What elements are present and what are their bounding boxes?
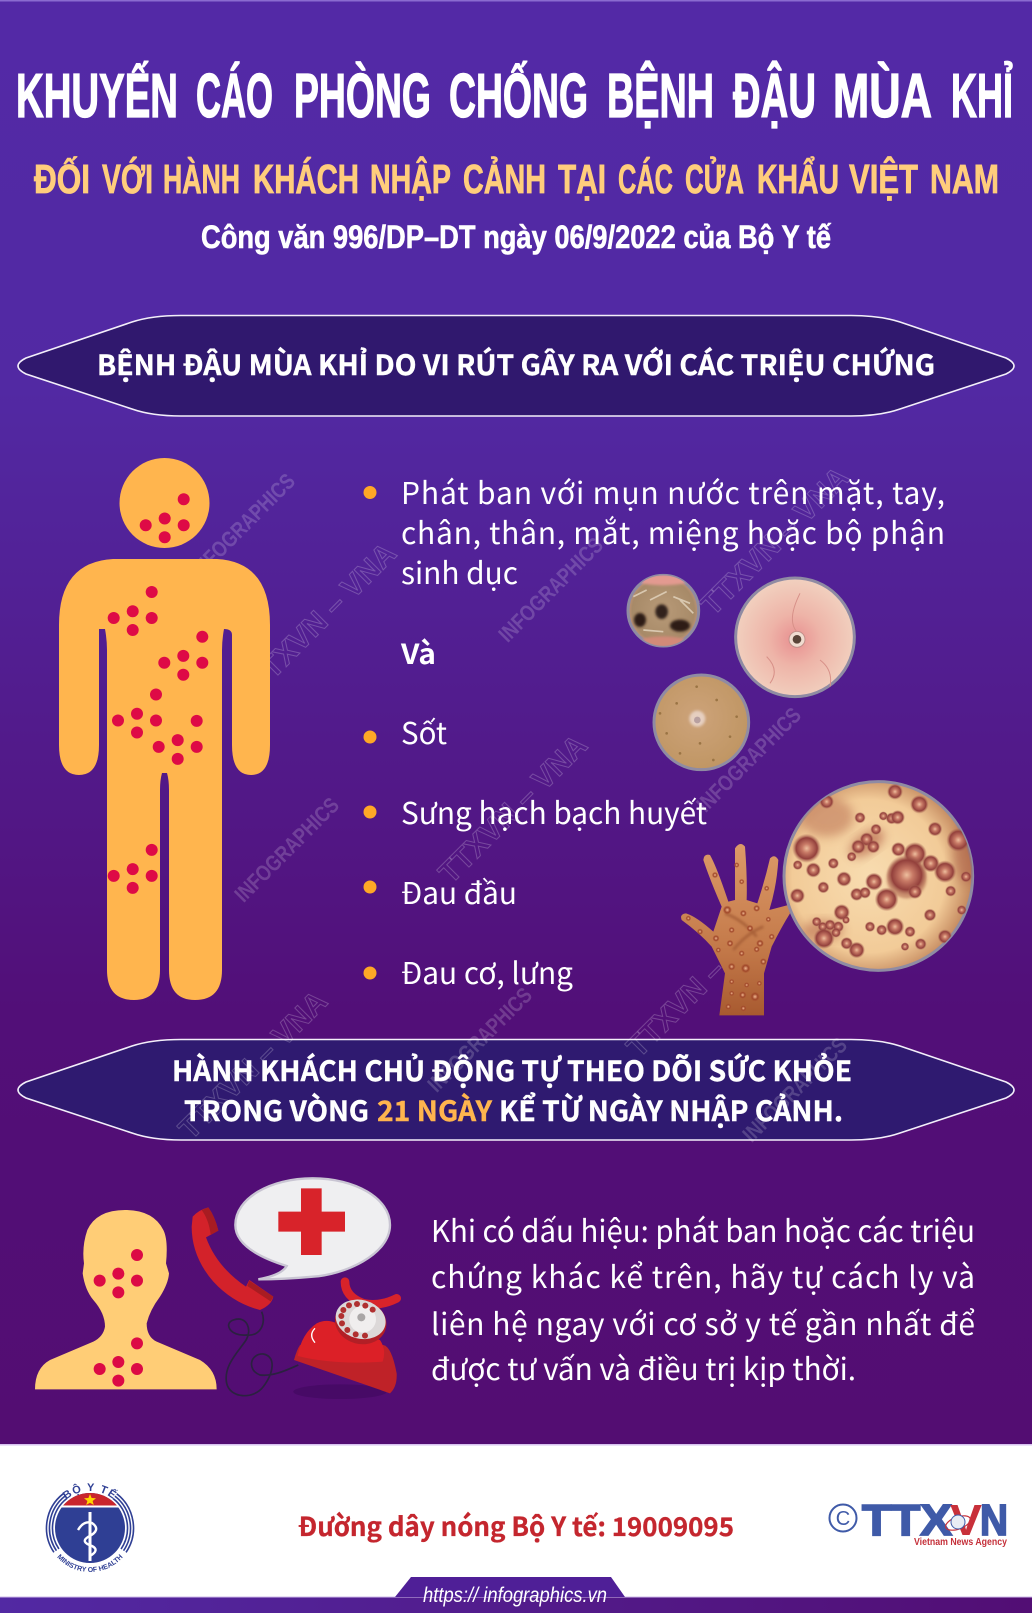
banner heading: symptoms: BỆNH ĐẬU MÙA KHỈ DO VI RÚT GÂY RA VỚI CÁC TRIỆU CHỨNG (97, 344, 935, 384)
watermarks: TTXVN – VNA (695, 461, 856, 622)
title: BỆNH (607, 62, 714, 131)
skin photos (628, 575, 980, 1015)
subtitle: VIỆT (849, 156, 918, 202)
footer panel (0, 1444, 1032, 1596)
logo: Ministry of Health: MINISTRY OF HEALTH (57, 1554, 123, 1572)
connector word: Và (400, 633, 436, 673)
title: CHỐNG (449, 62, 588, 131)
photo: scabs (628, 575, 699, 647)
website address: https:// infographics.vn (423, 1584, 607, 1607)
symptom: muscle and back pain: Đau cơ, lưng (401, 949, 573, 993)
logo: TTXVN: C (836, 1508, 850, 1530)
illustration: person bust and telephone (35, 1178, 397, 1399)
banner heading: monitor health for 21 days: KỂ TỪ NGÀY NHẬP CẢNH. (499, 1090, 843, 1130)
banner heading: monitor health for 21 days: HÀNH KHÁCH CHỦ ĐỘNG TỰ THEO DÕI SỨC KHỎE (172, 1050, 852, 1090)
banner heading: monitor health for 21 days: TRONG VÒNG (184, 1090, 369, 1130)
advice paragraph: liên hệ ngay với cơ sở y tế gần nhất để (431, 1300, 975, 1344)
subtitle: TẠI (558, 156, 606, 202)
logo: TTXVN: TTX (862, 1496, 952, 1545)
symptom: headache: Đau đầu (401, 869, 517, 913)
title (16, 62, 1013, 131)
icon: person bust with rash (35, 1210, 217, 1389)
watermarks: TTXVN – VNA (242, 537, 403, 698)
subtitle: ĐỐI (34, 156, 90, 202)
illustration: rash on hand (681, 844, 790, 1015)
photo: red lesion (736, 578, 854, 697)
logo: TTXVN (830, 1496, 1008, 1548)
icon: rotary telephone (293, 1282, 397, 1399)
photo: blister (654, 675, 749, 770)
banner heading: monitor health for 21 days (172, 1050, 852, 1130)
subtitle: KHẨU (757, 155, 839, 202)
advice paragraph: Khi có dấu hiệu: phát ban hoặc các triệu (431, 1207, 975, 1251)
title: CÁO (196, 62, 273, 131)
watermarks: TTXVN – VNA (173, 985, 334, 1146)
subtitle: NAM (930, 156, 999, 202)
subtitle: CẢNH (463, 156, 546, 202)
symptom: rash: Phát ban với mụn nước trên mặt, tay, (401, 469, 945, 513)
logo: TTXVN: Vietnam News Agency (914, 1537, 1007, 1548)
footer bar (0, 1577, 1032, 1613)
advice paragraph (431, 1207, 975, 1389)
hotline: Đường dây nóng Bộ Y tế: 19009095 (298, 1507, 734, 1544)
icon: speech bubble with red cross (235, 1178, 390, 1279)
banner: self monitoring shape (18, 1040, 1014, 1140)
title: PHÒNG (294, 62, 431, 131)
symptom: swollen lymph nodes: Sưng hạch bạch huyết (401, 789, 707, 833)
symptom: rash: sinh dục (401, 549, 518, 593)
document reference: Công văn 996/DP–DT ngày 06/9/2022 của Bộ Y tế (201, 219, 831, 255)
subtitle: VỚI (102, 156, 153, 202)
advice paragraph: chứng khác kể trên, hãy tự cách ly và (431, 1253, 975, 1297)
title: ĐẬU (733, 62, 816, 131)
title: KHUYẾN (16, 62, 178, 131)
watermarks (173, 461, 856, 1147)
subtitle: KHÁCH (253, 156, 359, 202)
symptom: rash (364, 469, 945, 593)
icon: phone cord (226, 1312, 298, 1396)
logo: TTXVN: V (950, 1496, 983, 1545)
subtitle: CÁC (618, 156, 673, 202)
watermarks: TTXVN – VNA (433, 729, 594, 890)
symptom: fever: Sốt (401, 709, 447, 753)
watermarks: INFOGRAPHICS (691, 702, 806, 817)
subtitle: HÀNH (163, 156, 240, 202)
symptom: fever (364, 709, 447, 753)
banner: symptoms shape (18, 316, 1014, 416)
subtitle (34, 155, 999, 202)
watermarks: INFOGRAPHICS (229, 792, 344, 907)
watermarks: INFOGRAPHICS (737, 1032, 852, 1147)
icon: handset (192, 1207, 273, 1310)
banner heading: monitor health for 21 days: 21 NGÀY (377, 1090, 493, 1130)
photo: magnified pustules (784, 782, 980, 970)
subtitle: NHẬP (370, 156, 451, 202)
watermarks: TTXVN – VNA (621, 903, 782, 1064)
logo: Ministry of Health (46, 1483, 134, 1572)
watermarks: INFOGRAPHICS (493, 532, 608, 647)
subtitle: CỬA (685, 156, 744, 202)
advice paragraph: được tư vấn và điều trị kịp thời. (431, 1345, 856, 1389)
logo: TTXVN: N (980, 1496, 1008, 1545)
title: MÙA (833, 62, 932, 131)
body figure with rash (59, 458, 270, 1000)
watermarks: INFOGRAPHICS (422, 982, 537, 1097)
symptom list (364, 469, 945, 993)
symptom: rash: chân, thân, mắt, miệng hoặc bộ phận (401, 509, 945, 553)
logo: Ministry of Health: BỘ Y TẾ (62, 1483, 118, 1499)
watermarks: INFOGRAPHICS (185, 468, 300, 583)
